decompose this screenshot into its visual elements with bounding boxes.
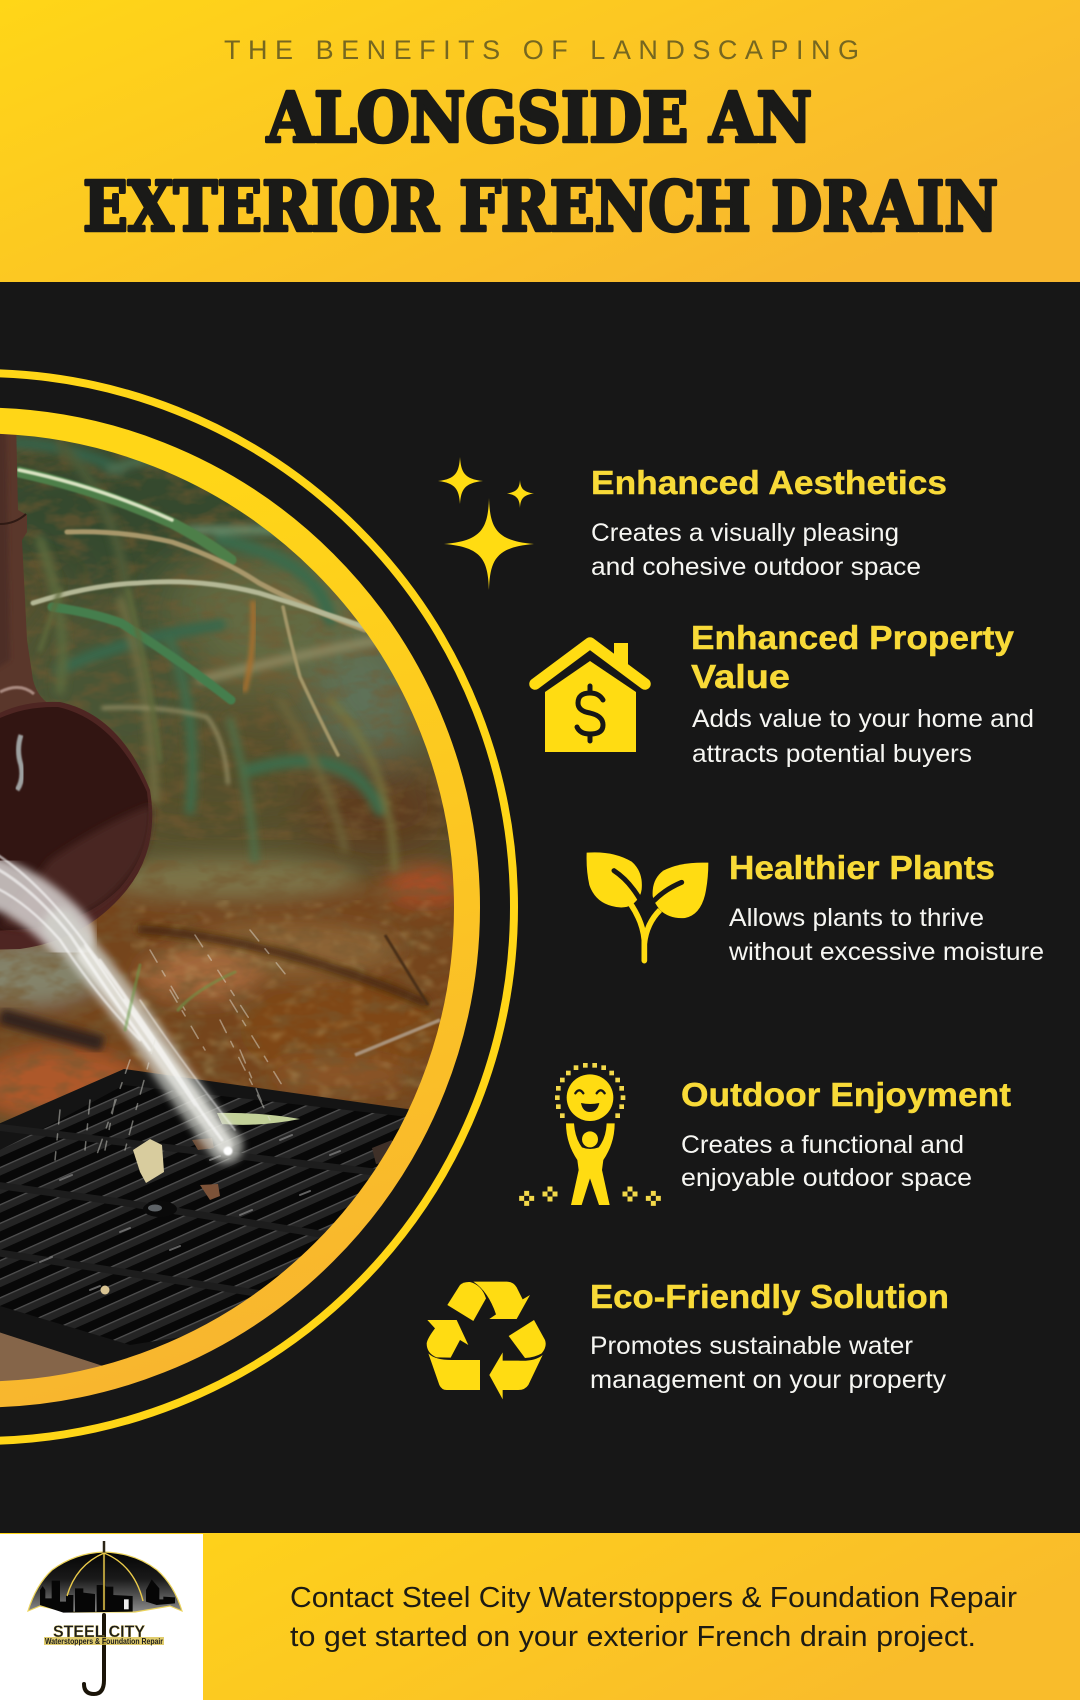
- heading: [691, 619, 1015, 695]
- ground: [0, 858, 480, 1121]
- description: Creates a functional and: [681, 1131, 964, 1159]
- description: Allows plants to thrive: [729, 904, 984, 932]
- photo: downspout pouring onto drain grate: [0, 420, 480, 1400]
- icon: recycle symbol: [427, 1282, 546, 1399]
- header banner: [0, 0, 1080, 282]
- item: enhanced aesthetics: [438, 457, 947, 590]
- call to action text: Contact Steel City Waterstoppers & Foundation Repair: [290, 1582, 1017, 1614]
- grass blades: [17, 443, 395, 870]
- drain grate: [0, 1069, 409, 1366]
- foliage background: [0, 430, 460, 855]
- description: without excessive moisture: [728, 938, 1044, 966]
- title: [83, 78, 998, 248]
- call to action text: [290, 1582, 1017, 1653]
- description: [591, 519, 921, 581]
- downspout: [0, 420, 152, 950]
- logo wordmark: STEEL CITY: [53, 1622, 146, 1641]
- description: [590, 1332, 947, 1394]
- description: and cohesive outdoor space: [591, 553, 921, 581]
- downspout opening: [0, 702, 152, 950]
- inner thick ring: [0, 420, 467, 1394]
- heading: Outdoor Enjoyment: [681, 1076, 1011, 1113]
- logo skyline: [40, 1579, 175, 1613]
- heading: Enhanced Aesthetics: [591, 464, 947, 501]
- water stream: [0, 850, 290, 1160]
- logo tagline: Waterstoppers & Foundation Repair: [45, 1637, 163, 1646]
- icon: sparkles: [438, 457, 534, 590]
- heading: Value: [691, 658, 790, 695]
- item: healthier plants: [587, 849, 1044, 966]
- icon: sprout: [587, 852, 708, 961]
- logo panel: [0, 1534, 203, 1700]
- title: ALONGSIDE AN: [266, 78, 812, 158]
- description: Adds value to your home and: [692, 705, 1034, 733]
- description: enjoyable outdoor space: [681, 1164, 972, 1192]
- item: eco-friendly solution: [427, 1278, 949, 1399]
- description: [681, 1131, 972, 1192]
- logo: Steel City umbrella: [28, 1541, 182, 1694]
- icon: happy person: [519, 1063, 661, 1206]
- description: Promotes sustainable water: [590, 1332, 913, 1360]
- circular photo with rings: [0, 373, 514, 1441]
- item: outdoor enjoyment: [519, 1063, 1011, 1206]
- heading: Eco-Friendly Solution: [590, 1278, 949, 1315]
- outer thin ring: [0, 373, 514, 1441]
- subtitle: THE BENEFITS OF LANDSCAPING: [224, 35, 859, 65]
- icon: house with dollar sign: [535, 643, 645, 752]
- description: [692, 705, 1034, 768]
- footer banner: [0, 1533, 1080, 1700]
- description: attracts potential buyers: [692, 740, 972, 768]
- heading: Healthier Plants: [729, 849, 995, 886]
- description: [728, 904, 1044, 966]
- call to action text: to get started on your exterior French drain project.: [290, 1621, 976, 1653]
- heading: Enhanced Property: [691, 619, 1015, 656]
- leaves on grate: [133, 1139, 164, 1183]
- item: enhanced property value: [535, 619, 1034, 768]
- description: management on your property: [590, 1366, 947, 1394]
- description: Creates a visually pleasing: [591, 519, 899, 547]
